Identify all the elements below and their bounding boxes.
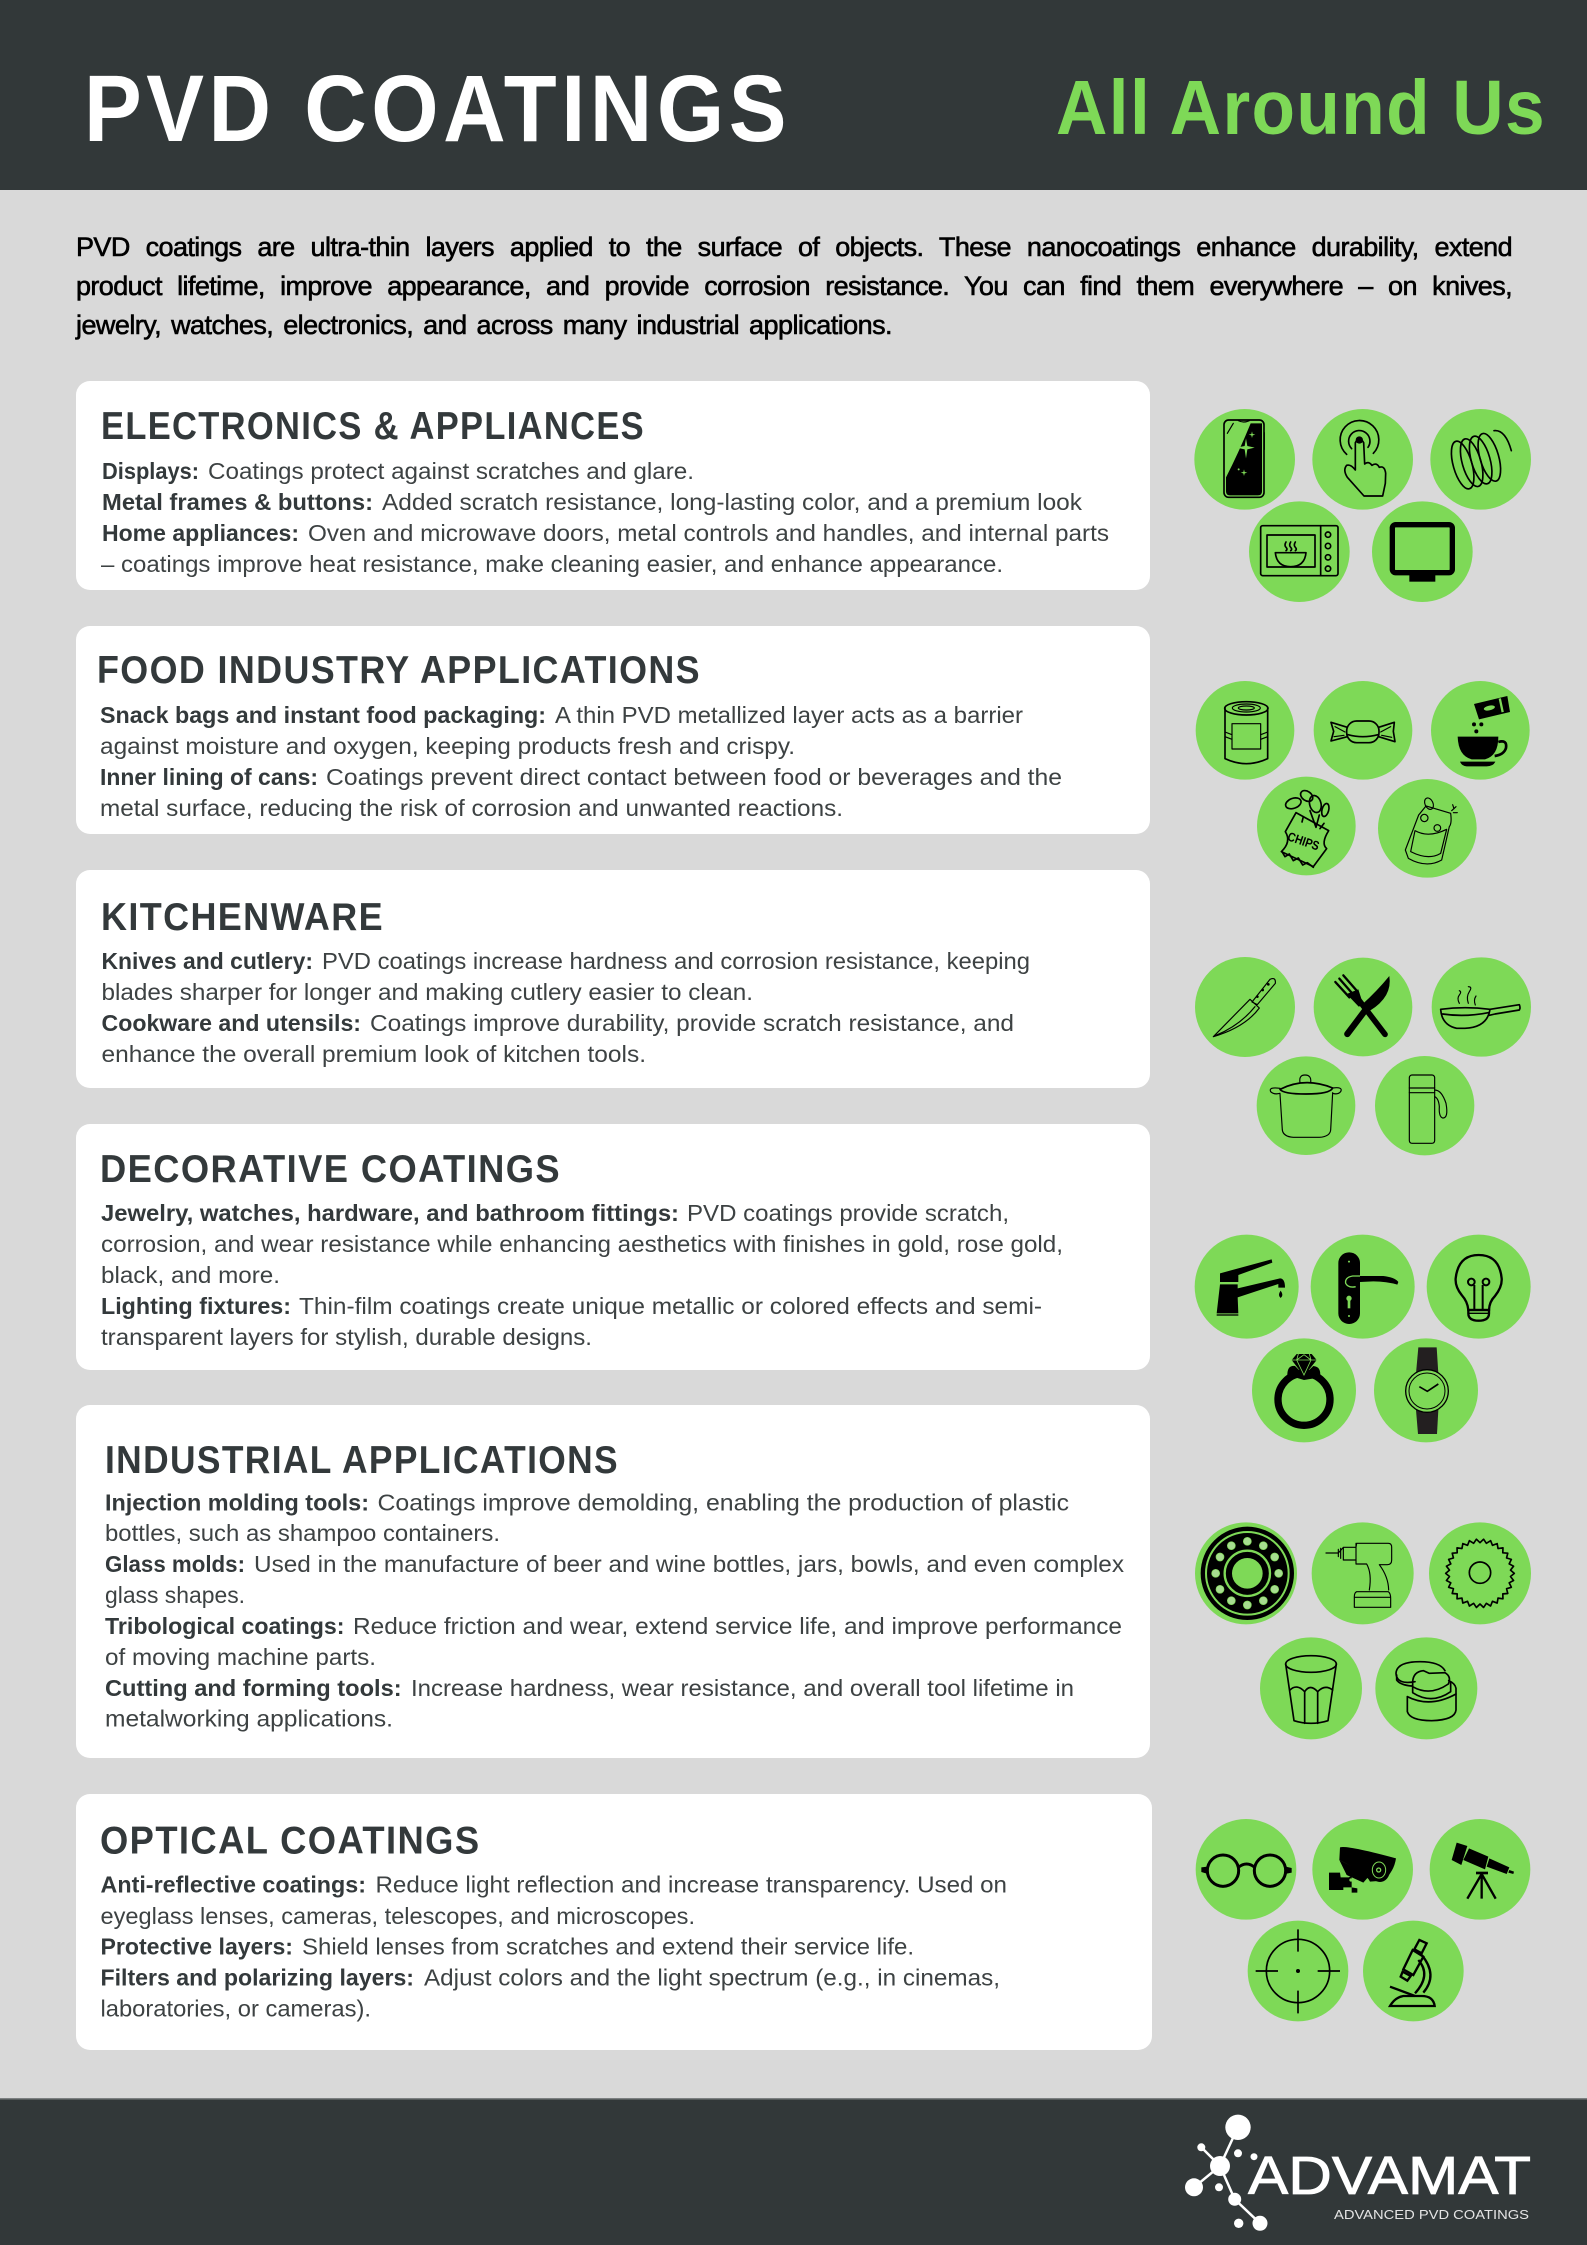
text: electronics: – coatings improve heat resistance, make cleaning easier, and enhance appearance. [101,551,1003,577]
text: electronics: Displays: [102,458,199,484]
text: industrial: glass shapes. [105,1582,245,1608]
text: optical: eyeglass lenses, cameras, telescopes, and microscopes. [100,1903,695,1929]
text: optical: Protective layers: [100,1934,293,1960]
text: optical: Adjust colors and the light spectrum (e.g., in cinemas, [424,1964,1000,1990]
text: industrial: metalworking applications. [105,1706,393,1732]
icon: glass tumbler [1260,1637,1362,1739]
title: PVD COATINGS [84,56,791,162]
icon: monitor [1372,501,1473,602]
icon: spring coil [1430,409,1531,510]
text: industrial: Glass molds: [105,1551,245,1577]
text: optical: Reduce light reflection and increase transparency. Used on [376,1872,1007,1898]
icons: kitchenware and decorative [1195,957,1531,1442]
icon: diamond ring [1252,1338,1356,1442]
text: kitchenware [102,948,1030,1067]
panel: optical coatings [76,1794,1152,2050]
text: industrial: bottles, such as shampoo containers. [105,1520,500,1546]
text: industrial: Used in the manufacture of beer and wine bottles, jars, bowls, and even complex [254,1551,1125,1577]
panel: food industry applications [76,626,1150,834]
icon: ball bearing [1195,1522,1297,1624]
icon: fork and knife [1314,958,1412,1056]
text: industrial: Reduce friction and wear, extend service life, and improve performance [353,1613,1122,1639]
icon: microscope [1363,1921,1464,2021]
text: decorative [101,1200,1063,1350]
text: kitchenware: blades sharper for longer and making cutlery easier to clean. [102,979,753,1005]
text: optical: laboratories, or cameras). [100,1996,371,2022]
text: food: against moisture and oxygen, keeping products fresh and crispy. [100,733,795,759]
icon: chips bag: CHIPS [1286,830,1321,853]
text: decorative: corrosion, and wear resistance while enhancing aesthetics with finishes in gold, rose gold, [101,1231,1063,1257]
text: electronics [101,458,1109,577]
icon: light bulb [1427,1235,1531,1339]
text: industrial: Coatings improve demolding, enabling the production of plastic [378,1490,1069,1516]
header band [0,0,1587,190]
icons: electronics and food [1194,409,1531,878]
icon: frying pan [1432,957,1531,1057]
text: decorative: transparent layers for stylish, durable designs. [101,1324,592,1350]
icon: food can [1196,681,1294,780]
heading: food: FOOD INDUSTRY APPLICATIONS [97,649,701,692]
panel: decorative coatings [76,1124,1150,1370]
text: kitchenware: Cookware and utensils: [102,1010,361,1036]
icon: microwave [1249,501,1350,602]
icon: door handle [1311,1235,1415,1339]
logo: Advamat [1185,2115,1531,2231]
text: decorative: Jewelry, watches, hardware, and bathroom fittings: [101,1200,679,1226]
text: electronics: Metal frames & buttons: [102,489,373,515]
footer band [0,2098,1587,2245]
logo: Advamat: ADVANCED PVD COATINGS [1334,2208,1529,2222]
icon: power drill [1312,1522,1414,1624]
text: industrial: Cutting and forming tools: [105,1675,402,1701]
text: industrial: of moving machine parts. [105,1644,376,1670]
icon: soda can [1378,779,1477,878]
text: food: metal surface, reducing the risk of corrosion and unwanted reactions. [100,795,843,821]
intro paragraph: product lifetime, improve appearance, and provide corrosion resistance. You can find them everywhere – on knives, [76,271,1512,301]
heading: kitchenware: KITCHENWARE [101,896,384,939]
text: decorative: Lighting fixtures: [101,1293,291,1319]
icons: industrial and optical [1195,1522,1531,2021]
icon: coffee cup with sachet [1431,681,1530,780]
icon: security camera [1312,1819,1413,1920]
text: electronics: Oven and microwave doors, metal controls and handles, and internal parts [308,520,1109,546]
intro paragraph: jewelry, watches, electronics, and across many industrial applications. [76,310,892,340]
icon: smartphone [1194,409,1295,510]
icon: chef knife [1195,957,1295,1057]
icon: cooking pot [1257,1056,1355,1155]
text: optical: Anti-reflective coatings: [100,1872,366,1898]
text: food: Inner lining of cans: [100,764,318,790]
text: kitchenware: enhance the overall premium look of kitchen tools. [102,1041,646,1067]
icon: touch finger [1312,409,1413,510]
text: optical: Shield lenses from scratches and extend their service life. [302,1934,914,1960]
heading: decorative: DECORATIVE COATINGS [100,1148,561,1191]
icon: cream jar [1375,1637,1477,1739]
text: optical: Filters and polarizing layers: [100,1964,414,1990]
text: optical [100,1872,1007,2022]
icon: wristwatch [1374,1338,1478,1442]
intro paragraph: PVD coatings are ultra-thin layers applied to the surface of objects. These nanocoatings enhance durability, extend [76,232,1512,262]
text: decorative: PVD coatings provide scratch, [687,1200,1009,1226]
heading: optical: OPTICAL COATINGS [100,1820,480,1862]
heading: electronics: ELECTRONICS & APPLIANCES [101,405,645,448]
text: electronics: Home appliances: [102,520,299,546]
icon: eyeglasses [1196,1819,1296,1920]
logo: Advamat: ADVAMAT [1248,2146,1531,2206]
text: food: Coatings prevent direct contact between food or beverages and the [326,764,1062,790]
text: kitchenware: Knives and cutlery: [102,948,313,974]
icon: chips bag [1257,777,1356,875]
panel: electronics and appliances [76,381,1150,590]
intro paragraph [75,232,1512,340]
icon: saw blade [1429,1522,1531,1624]
text: food: Snack bags and instant food packaging: [100,702,546,728]
text: electronics: Added scratch resistance, long-lasting color, and a premium look [382,489,1083,515]
text: food [100,702,1062,821]
icon: crosshair target [1248,1921,1348,2021]
text: kitchenware: PVD coatings increase hardness and corrosion resistance, keeping [322,948,1030,974]
text: decorative: black, and more. [101,1262,280,1288]
text: industrial: Tribological coatings: [105,1613,344,1639]
panel: kitchenware [76,870,1150,1088]
text: kitchenware: Coatings improve durability, provide scratch resistance, and [370,1010,1014,1036]
icon: telescope [1430,1819,1530,1920]
icon: faucet [1195,1235,1299,1339]
text: food: A thin PVD metallized layer acts as a barrier [555,702,1023,728]
text: industrial: Increase hardness, wear resistance, and overall tool lifetime in [411,1675,1074,1701]
icon: candy [1314,681,1412,780]
text: industrial [105,1490,1125,1732]
panel: industrial applications [76,1405,1150,1758]
text: decorative: Thin-film coatings create unique metallic or colored effects and semi- [299,1293,1042,1319]
heading: industrial: INDUSTRIAL APPLICATIONS [105,1439,619,1482]
subtitle: All Around Us [1056,65,1546,151]
text: electronics: Coatings protect against scratches and glare. [208,458,694,484]
icon: thermos bottle [1375,1056,1474,1155]
text: industrial: Injection molding tools: [105,1490,369,1516]
